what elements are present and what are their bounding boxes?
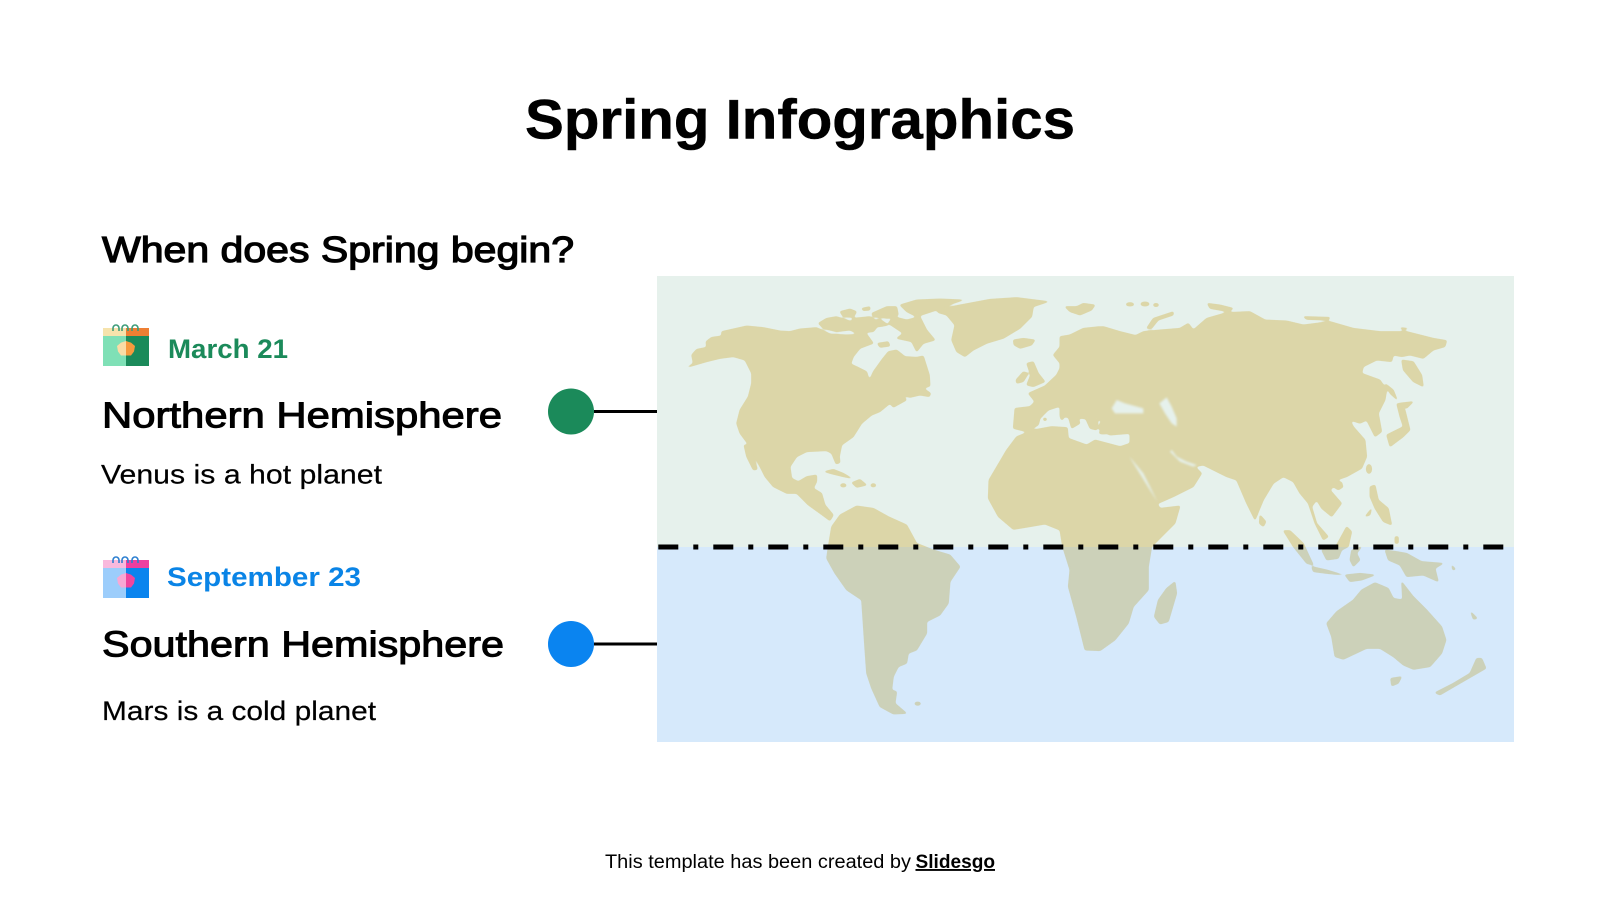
heading: Northern Hemisphere: Northern Hemisphere <box>102 394 502 435</box>
panel: southern hemisphere entry <box>102 557 657 726</box>
panel: northern hemisphere entry <box>101 325 657 490</box>
description: Mars: Mars is a cold planet <box>102 696 377 726</box>
connector: south <box>594 642 657 646</box>
marker: green dot <box>548 388 594 434</box>
footer credit: This template has been created by <box>605 852 912 873</box>
marker: blue dot <box>548 621 594 667</box>
icon: green calendar <box>103 325 149 366</box>
date: March 21: March 21 <box>168 334 288 364</box>
connector: north <box>594 410 657 413</box>
description: Venus: Venus is a hot planet <box>101 460 383 490</box>
footer credit: Slidesgo <box>916 852 995 873</box>
heading: Southern Hemisphere: Southern Hemisphere <box>102 624 504 665</box>
world map panel <box>657 276 1514 742</box>
icon: blue calendar <box>103 557 149 598</box>
north hemisphere background <box>657 276 1514 547</box>
equator dash-dot line <box>658 544 1504 550</box>
south hemisphere background <box>657 547 1514 742</box>
land north of the equator <box>688 297 1447 547</box>
title: Spring Infographics <box>525 88 1075 150</box>
date: September 23: September 23 <box>167 562 361 592</box>
land south of the equator <box>826 547 1486 714</box>
subheading: when does spring begin: When does Spring begin? <box>102 229 574 270</box>
